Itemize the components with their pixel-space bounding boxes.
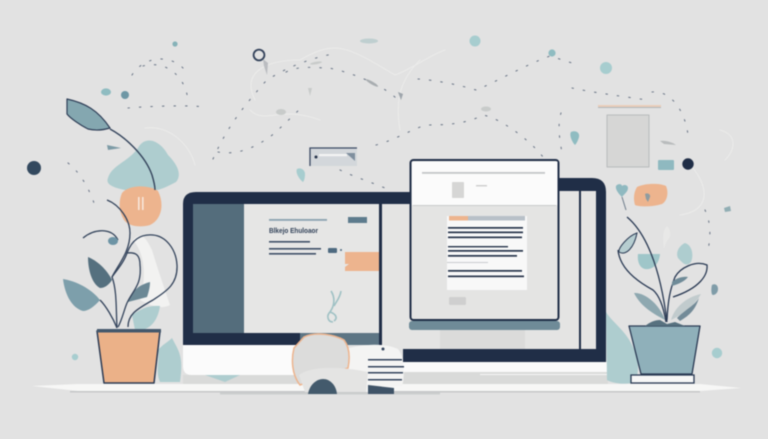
screen content panel [244,204,379,333]
icon: magnifier ring [254,50,268,75]
peach tag [634,184,667,206]
teal drop [297,168,305,182]
stem: top [110,129,155,190]
left pot [97,329,161,383]
desktop monitor [183,178,606,362]
peach bar above picture [598,105,661,108]
centre helmet and stack ornament [292,334,404,394]
teal heart [616,184,628,197]
leaf: upper left outline [619,233,637,253]
small teal sprig icon [328,291,341,322]
monitor frame: right [403,178,606,362]
dark dot left [27,161,41,175]
small grey background marks [276,38,491,115]
right screen panels [558,191,579,349]
background dotted trails [68,54,710,250]
stems [83,200,177,328]
left blob behind plant [107,141,179,191]
screen sidebar [193,204,244,333]
teal background dots [72,36,722,360]
leaf: middle dark [88,257,112,288]
content header line [269,219,327,221]
right plant [618,217,707,322]
peach shape [120,186,161,226]
right teal blob [606,312,638,384]
article card [447,216,527,290]
screen text lines [269,241,342,255]
right wall picture [598,105,661,167]
leaf: top [67,99,110,130]
white shard behind left plant [133,236,170,307]
peach button [345,252,379,271]
right pot [629,320,700,383]
tablet window [409,160,560,349]
faint white background strokes [145,48,733,215]
shelf [32,384,741,394]
left plant [63,99,177,328]
leaves: lower [634,293,665,320]
centre screen panel [382,204,412,349]
right floating icons [616,141,731,295]
monitor base white [183,345,609,384]
monitor frame: left [183,192,412,345]
stems [618,217,707,322]
icon: small browser card [310,148,357,166]
leaf: lower right [128,282,150,302]
leaf: lower left [63,279,100,311]
screen heading text: Blkejo Ehuloaor [269,228,318,235]
